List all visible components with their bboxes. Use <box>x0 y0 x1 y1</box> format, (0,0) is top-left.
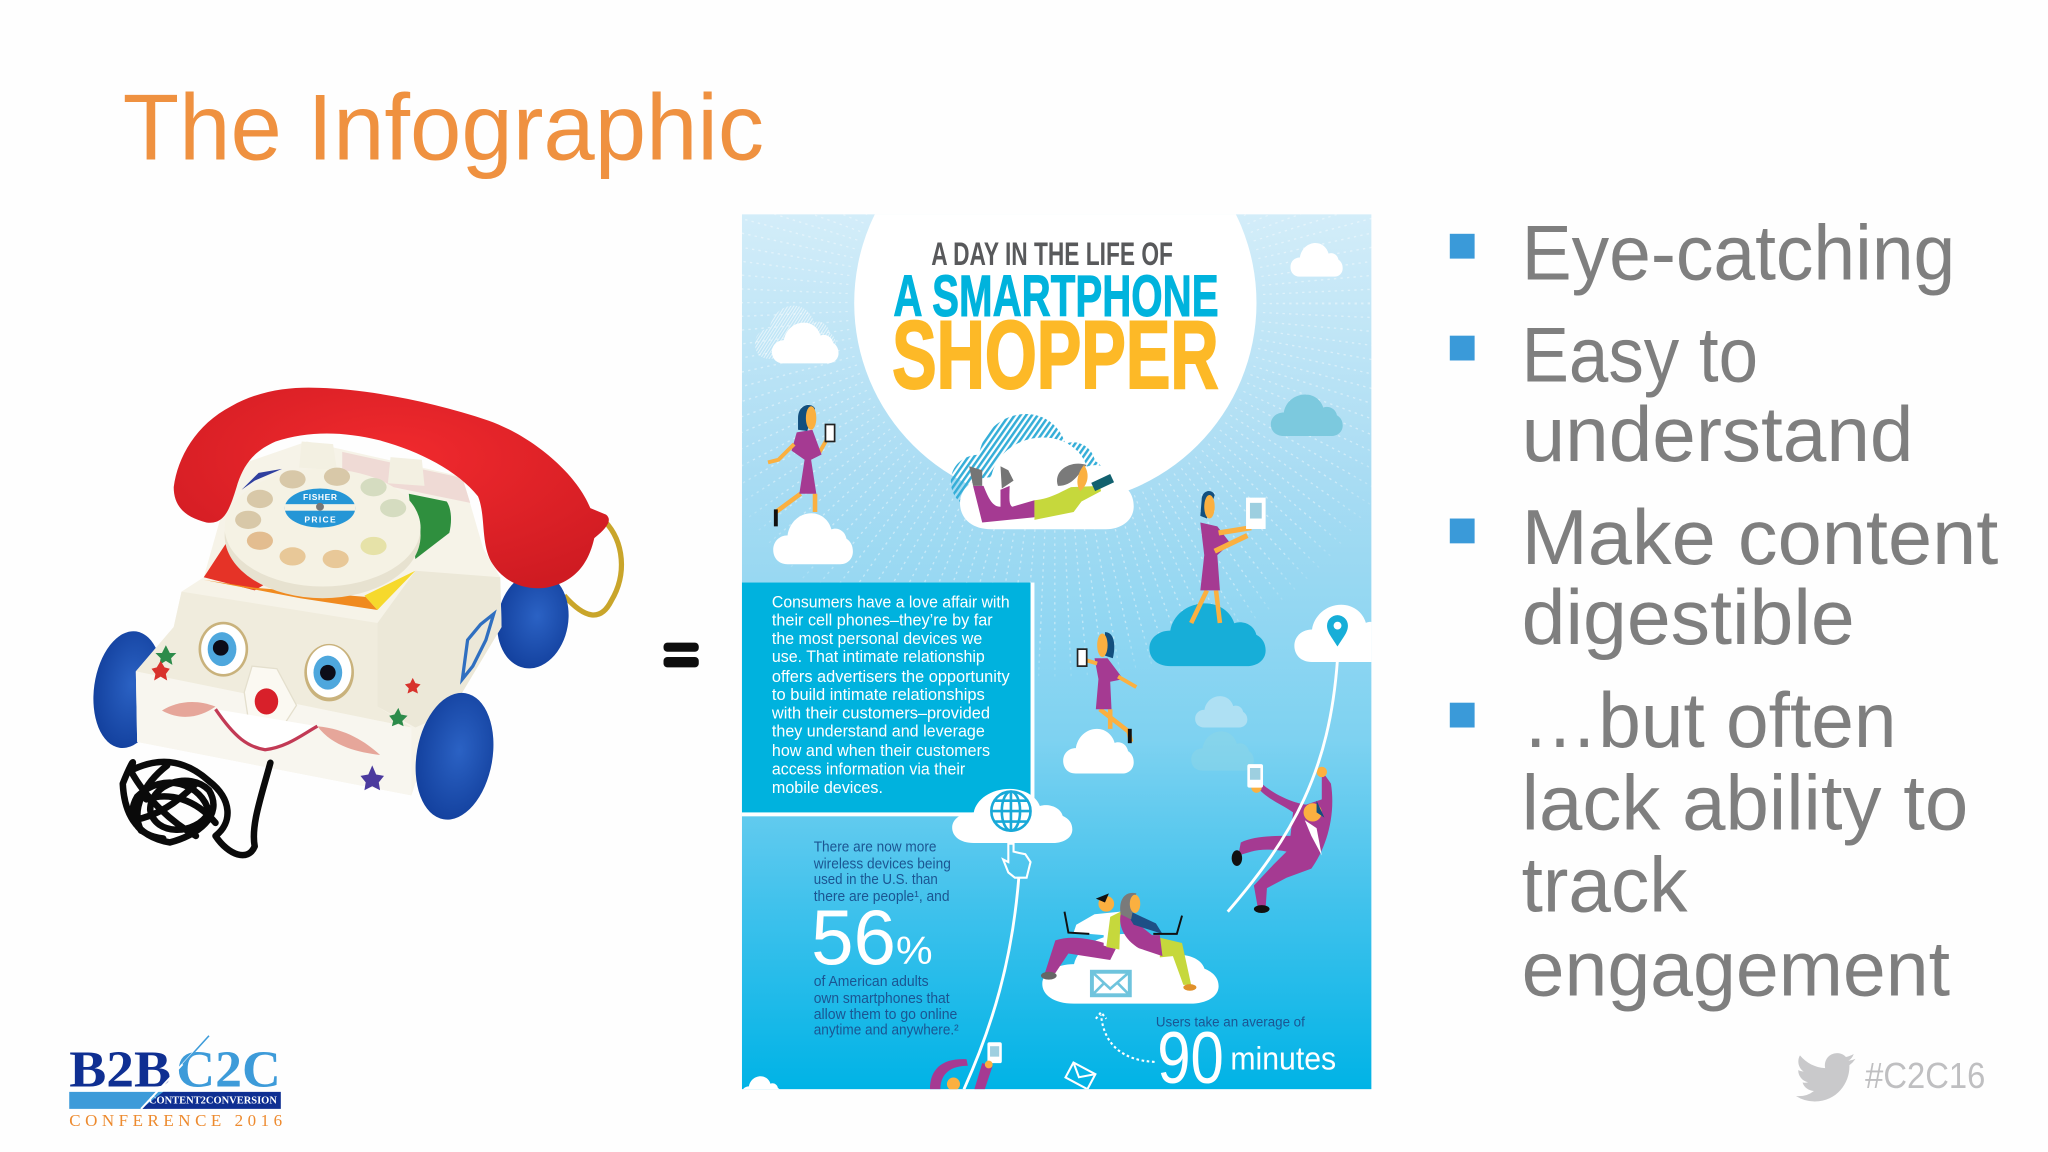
pin cloud string <box>1228 660 1337 912</box>
bullet text: digestible <box>1522 573 1855 661</box>
right wheel <box>406 687 503 826</box>
yellow handset cord <box>564 521 621 615</box>
panel: smartphone shopper infographic <box>742 214 1372 1090</box>
icon: twitter bird <box>1796 1053 1855 1101</box>
dial label: PRICE <box>304 514 336 524</box>
white sun circle <box>854 214 1256 490</box>
phone front plane <box>136 592 411 728</box>
icon: tilted envelope <box>1065 1063 1095 1089</box>
phone silhouette <box>136 441 502 795</box>
bullet text: …but often <box>1522 676 1896 764</box>
logo: B2B C2C conference: CONFERENCE 2016 <box>69 1111 282 1130</box>
bullet text <box>1522 209 1999 1012</box>
logo: B2B C2C conference: C2C <box>176 1041 281 1099</box>
bullet text: Make content <box>1522 493 1999 581</box>
intro text box: their cell phones–they’re by far <box>772 612 993 630</box>
bullet text: understand <box>1522 390 1913 478</box>
left eye <box>199 622 248 677</box>
title: The Infographic <box>123 74 764 179</box>
laptop cloud with two people <box>1041 893 1219 1004</box>
90 minutes statistic: minutes <box>1230 1040 1336 1077</box>
black pull cord <box>123 762 270 855</box>
intro text box: offers advertisers the opportunity <box>772 668 1010 686</box>
wireless devices statistic: anytime and anywhere.² <box>814 1022 959 1038</box>
bullet text: track <box>1522 841 1688 929</box>
wireless devices statistic: used in the U.S. than <box>814 872 938 888</box>
dotted arrow <box>1096 1012 1155 1062</box>
red handset <box>174 388 609 588</box>
heading: SHOPPER <box>892 302 1219 409</box>
intro text box: to build intimate relationships <box>772 686 985 704</box>
intro text box: with their customers–provided <box>771 704 990 722</box>
left wheel <box>86 627 170 753</box>
woman with laptop <box>1120 893 1196 991</box>
logo: B2B C2C conference: B2B <box>69 1041 171 1099</box>
bottom person and phone <box>930 1042 1002 1091</box>
wireless devices statistic: there are people¹, and <box>814 889 950 905</box>
center cloud with lying woman <box>951 414 1134 529</box>
bullet text: lack ability to <box>1522 758 1968 846</box>
bullet text: Easy to <box>1522 310 1758 398</box>
clouds <box>742 243 1392 1100</box>
back wheel <box>490 567 576 674</box>
bulleted list <box>1450 209 1999 1012</box>
wireless devices statistic: wireless devices being <box>813 857 951 873</box>
hashtag text: #C2C16 <box>1865 1055 1985 1096</box>
intro text box: access information via their <box>772 761 966 779</box>
logo: B2B C2C conference: CONTENT2CONVERSION <box>149 1096 277 1107</box>
intro text box: the most personal devices we <box>772 630 982 648</box>
bullet text: Eye-catching <box>1522 209 1955 297</box>
globe cloud <box>952 789 1072 843</box>
cradle and grill <box>299 441 470 503</box>
nose <box>244 666 296 724</box>
intro text box: mobile devices. <box>772 779 883 797</box>
bullet squares <box>1450 234 1475 728</box>
wireless devices statistic <box>811 840 959 1038</box>
dial label: FISHER <box>303 492 337 502</box>
sky background <box>742 214 1371 1089</box>
hashtag with twitter bird <box>1796 1053 1985 1101</box>
pointer string <box>964 878 1019 1089</box>
rotary dial <box>225 468 421 598</box>
equals sign <box>664 643 699 667</box>
icon: envelope in cloud <box>1092 972 1130 995</box>
woman with tablet (right) <box>1191 491 1266 623</box>
man with laptop <box>1041 893 1121 980</box>
smile and cheeks <box>162 702 380 755</box>
wireless devices statistic: There are now more <box>814 840 936 856</box>
radiating dots <box>742 214 1372 676</box>
heading <box>893 242 1218 390</box>
intro text box: Consumers have a love affair with <box>772 593 1010 611</box>
logo: B2B C2C conference <box>69 1036 282 1130</box>
rainbow wedge <box>204 469 451 610</box>
intro text box: use. That intimate relationship <box>772 648 985 666</box>
90 minutes statistic: 90 <box>1157 1018 1224 1099</box>
heading: A SMARTPHONE <box>893 264 1219 329</box>
right eye <box>304 644 354 701</box>
wireless devices statistic: allow them to go online <box>814 1007 957 1023</box>
woman walking with phone (center) <box>1078 632 1136 743</box>
icon: globe <box>991 792 1031 831</box>
intro text box <box>742 583 1034 816</box>
bullet text: engagement <box>1522 924 1950 1012</box>
phone base front <box>136 671 411 795</box>
heading: A DAY IN THE LIFE OF <box>931 235 1173 272</box>
56 percent: % <box>896 930 933 973</box>
wireless devices statistic: own smartphones that <box>814 991 950 1007</box>
90 minutes statistic <box>1156 1016 1335 1084</box>
icon: location pin <box>1327 615 1348 647</box>
lying woman <box>969 464 1114 522</box>
56 percent <box>814 910 932 965</box>
wireless devices statistic: of American adults <box>814 974 929 990</box>
woman walking with phone (left) <box>768 405 835 526</box>
intro text box: how and when their customers <box>772 742 990 760</box>
man swinging on string <box>1232 764 1332 913</box>
dial label <box>285 488 355 528</box>
intro text box: they understand and leverage <box>772 723 985 741</box>
56 percent: 56 <box>811 893 896 981</box>
90 minutes statistic: Users take an average of <box>1156 1015 1305 1030</box>
icon: pointing hand <box>1003 844 1031 878</box>
toy telephone illustration <box>86 388 621 855</box>
phone side plane <box>377 571 502 728</box>
stars <box>152 614 494 790</box>
